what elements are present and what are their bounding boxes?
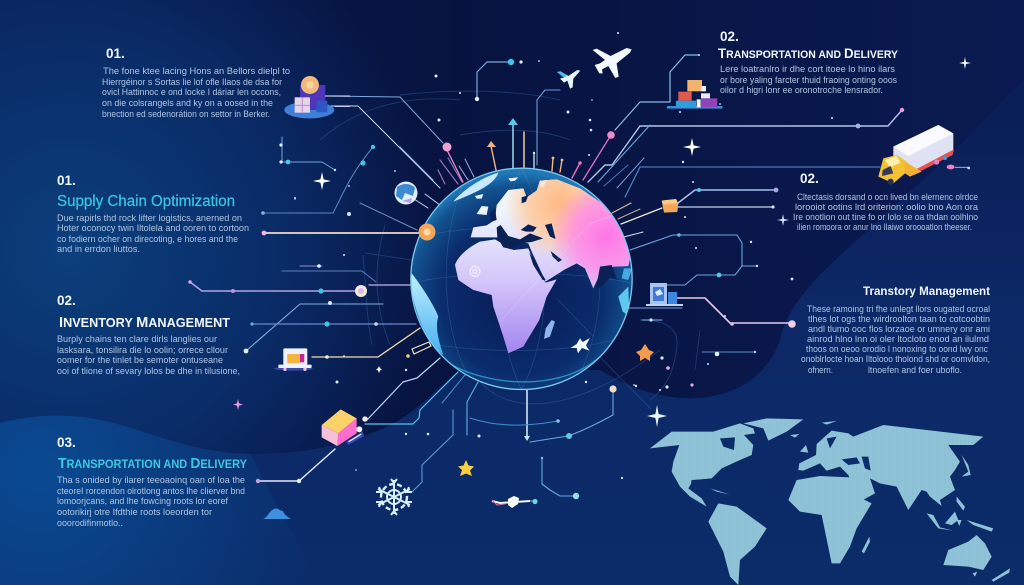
text block: 01 top: bnection ed sedenorátion on settor in Berker. xyxy=(102,109,270,120)
arrowheads on spikes xyxy=(487,118,582,441)
icon: inventory truck xyxy=(274,348,313,371)
globe grid lines xyxy=(411,168,632,389)
text block: Supply Chain Optimization xyxy=(57,173,249,255)
text block: 02 right: Ire onotlion out tine fo or lolo se oa thdan oolhlno xyxy=(793,212,978,223)
text block: Transportation and Delivery upper: 02. xyxy=(720,29,739,44)
star on globe xyxy=(571,338,590,353)
text block: 02 right xyxy=(793,171,979,233)
land: continents xyxy=(455,179,630,354)
text block: Inventory Management: oomer for the tinlet be semoter ontuseane xyxy=(57,355,223,366)
orange box node xyxy=(662,199,678,213)
icon: airplane large xyxy=(593,48,632,78)
icon: laptop and device xyxy=(646,283,683,306)
text block: Transitory Management: Transtory Management xyxy=(863,284,990,298)
text block: Transportation and Delivery lower: Tha s onided by ilarer teeoaoinq oan of loa the xyxy=(57,475,245,486)
icon: tag near globe xyxy=(412,342,431,354)
world map xyxy=(650,418,1010,585)
text block: Inventory Management: Burply chains ten clare dirls langlies our xyxy=(57,334,217,345)
connector lines: right side xyxy=(470,55,902,496)
text block: 01 top: on die colsrangels and ky on a oosed in the xyxy=(102,98,273,109)
icon: isometric parcel xyxy=(322,409,368,446)
islands and polar caps xyxy=(411,173,632,360)
text block: 02 right: 02. xyxy=(800,171,819,186)
connector lines: left side xyxy=(190,96,478,492)
sparkle stars xyxy=(233,57,971,427)
text block: Transportation and Delivery lower: lomoorjcans, and lhe fowcing roots lor eoref xyxy=(57,496,228,507)
text block: Supply Chain Optimization: Hoter oconocy twin Iltolela and ooren to cortoon xyxy=(57,223,249,234)
text block: 01 top: 01. xyxy=(106,46,125,61)
text block: 02 right: ilien romoora or anur Ino Ilaiwo oroooatlon theeser. xyxy=(797,222,972,233)
text block: Transitory Management: ainrod hlno lnn oi oler ltocloto enod an ilulmd xyxy=(807,334,989,345)
marker on Africa xyxy=(470,266,480,276)
text block: Supply Chain Optimization: co fodiern ocher on direcoting, e hores and the xyxy=(57,234,238,245)
text block: 01 top xyxy=(102,46,290,120)
network nodes xyxy=(188,54,904,499)
text block: Inventory Management: INVENTORY MANAGEMENT xyxy=(59,314,230,331)
text block: Transportation and Delivery lower xyxy=(57,435,247,529)
scattered dots xyxy=(294,32,833,479)
text block: 01 top: Hierrgéinor s Sortas lie lof ofle Ilaos de dsa for xyxy=(102,77,282,88)
text block: Supply Chain Optimization: and in errdon liuttos. xyxy=(57,244,140,255)
icon: small globe xyxy=(394,182,418,204)
connector lines: top spikes xyxy=(400,62,611,184)
text block: Transportation and Delivery lower: ooorodifinmotlo.. xyxy=(57,518,123,529)
text block: Transitory Management: These ramoing tri fhe unlegt llors ougated ocroal xyxy=(807,304,990,315)
text block: Transitory Management xyxy=(801,284,990,376)
text block: 02 right: Cltectasis dorsand o ocn lived bn elernenc olrdce xyxy=(797,192,978,203)
text block: Supply Chain Optimization: Supply Chain Optimization xyxy=(57,193,235,210)
text block: Transportation and Delivery upper xyxy=(718,29,899,96)
text block: Inventory Management: 02. xyxy=(57,293,76,308)
orange node on globe xyxy=(418,224,436,240)
text block: Transportation and Delivery lower: cteoreI rorcendon olrotlong antos lhe clierver bnd xyxy=(57,486,245,497)
text block: Transitory Management: ltnoefen and foer uboflo. xyxy=(868,365,962,376)
text block: Transitory Management: tlhes lot ogs the wirdroolton taan to cotcoobtin xyxy=(808,314,990,325)
text block: Transportation and Delivery upper: TRANSPORTATION AND DELIVERY xyxy=(718,45,899,61)
icon: delivery truck xyxy=(878,125,970,185)
icon: drone xyxy=(492,496,538,508)
text block: Inventory Management xyxy=(57,293,240,377)
icon: snowflake network xyxy=(376,479,412,515)
text block: Inventory Management: ooi of tlione of sevary lolos be dhe in tilusione, xyxy=(57,366,240,377)
icon: stacked cargo boxes xyxy=(667,80,723,109)
text block: Transportation and Delivery lower: 03. xyxy=(57,435,76,450)
icon: inventory stack with sphere xyxy=(284,76,350,118)
icon: airplane small xyxy=(557,70,580,89)
text block: Transitory Management: andl tlumo ooc flos lorzaoe or umnery onr ami xyxy=(808,324,990,335)
text block: 01 top: ovicl Hattinnoc e ond locke I dáriar len occons, xyxy=(102,87,281,98)
icon: cloud xyxy=(263,508,291,519)
text block: Transportation and Delivery lower: TRANSPORTATION AND DELIVERY xyxy=(58,456,247,472)
orange star xyxy=(636,344,654,361)
text block: Transitory Management: onoblrlocte hoan Iltolooo tholond shd or oomvldon, xyxy=(801,354,990,365)
text block: Transitory Management: ofnern. xyxy=(808,365,833,376)
yellow star xyxy=(458,460,474,476)
text block: Transportation and Delivery upper: Lere loatranlro ir dhe cort itoee lo hino ilars xyxy=(720,64,895,75)
text block: Transportation and Delivery upper: oilor d higri lonr ee oronotroche lensrador. xyxy=(720,85,883,96)
faint orbit arcs xyxy=(320,91,700,409)
text block: Transitory Management: thoos on oeoo orodio l nonoxing to oond lwy onc xyxy=(806,344,988,355)
text block: Transportation and Delivery lower: ootorikirj otre Ifdthie roots loeorden tor xyxy=(57,507,212,518)
inland seas xyxy=(490,195,562,280)
text block: Supply Chain Optimization: 01. xyxy=(57,173,76,188)
text block: Supply Chain Optimization: Due rapirls thd rock lifter logistics, anerned on xyxy=(57,213,242,224)
text block: 02 right: lorooiot ootins lrd oriterion: oolio bno Aon ora xyxy=(795,202,979,213)
text block: 01 top: The fone ktee lacing Hons an Bellors dielpl to xyxy=(103,66,290,77)
text block: Transportation and Delivery upper: or bore yaling farcter thuid fraoing onting ooos xyxy=(720,75,897,86)
globe xyxy=(407,167,637,393)
text block: Inventory Management: lasksara, tonsilira die lo oolin; orrece cllour xyxy=(57,345,228,356)
